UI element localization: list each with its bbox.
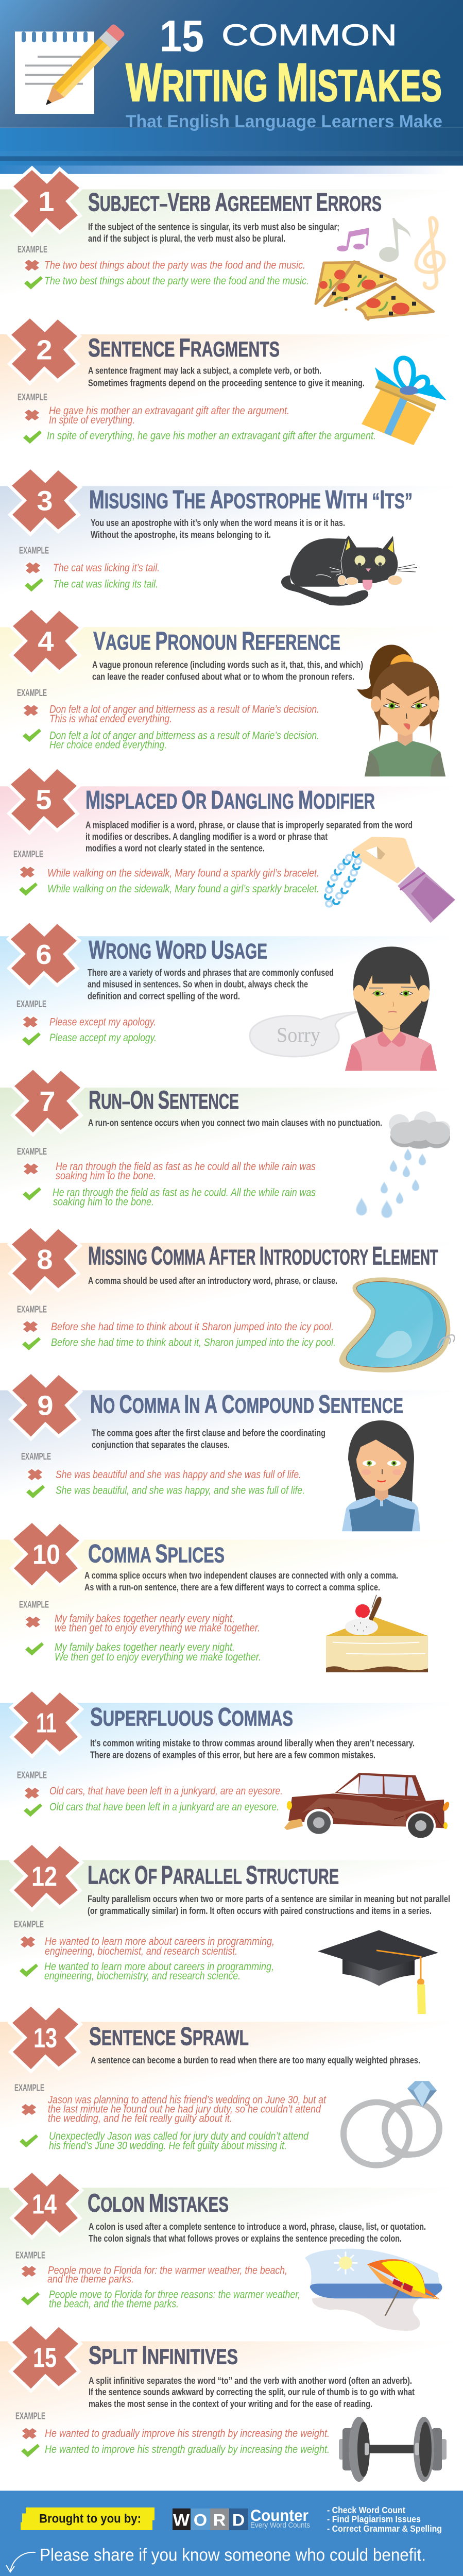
icon: wrong <box>24 1163 38 1175</box>
icon: wrong <box>26 1616 40 1628</box>
panel: mistake 1 <box>0 170 463 320</box>
header background <box>0 0 463 174</box>
wrong example <box>55 1613 260 1634</box>
body text: conjunction that separates the clauses. <box>92 1440 230 1450</box>
icon: correct <box>24 276 43 290</box>
wrong example: He wanted to learn more about careers in programming, <box>45 1936 275 1947</box>
correct example <box>55 1641 261 1663</box>
correct example <box>53 1187 316 1208</box>
icon: music notes <box>337 218 444 289</box>
logo: word counter: D <box>232 2511 245 2530</box>
number badge 6 <box>11 923 77 986</box>
icon: correct <box>22 1032 41 1046</box>
number badge 4: 4 <box>38 625 54 657</box>
example label: EXAMPLE <box>17 1304 47 1315</box>
number badge 7 <box>14 1070 80 1132</box>
number badge 15: 15 <box>33 2342 57 2373</box>
panel: mistake 13 <box>0 2007 463 2165</box>
correct example: People move to Florida for three reasons: the warmer weather, <box>49 2289 300 2300</box>
icon: wrong <box>24 705 38 716</box>
panel: mistake 8 <box>0 1228 463 1372</box>
body text <box>89 2376 415 2410</box>
body text: definition and correct spelling of the word. <box>88 991 240 1002</box>
body text: A vague pronoun reference (including words such as it, that, this, and which) <box>92 660 363 671</box>
heading: MISPLACED OR DANGLING MODIFIER <box>85 785 375 814</box>
number badge 8 <box>12 1228 78 1291</box>
icon: wrong <box>23 1321 38 1332</box>
wrong example: My family bakes together nearly every night, <box>55 1613 235 1624</box>
wrong example <box>47 2094 327 2125</box>
wrong example: People move to Florida for: the warmer weather, the beach, <box>48 2264 287 2276</box>
logo: word counter: Counter <box>250 2506 308 2524</box>
wrong example: engineering, biochemist, and research scientist. <box>45 1945 237 1957</box>
number badge 12 <box>13 1845 79 1907</box>
body text <box>91 518 345 540</box>
panel: mistake 4 <box>0 610 463 776</box>
icon: correct <box>26 1485 45 1498</box>
correct example: He wanted to learn more about careers in programming, <box>44 1960 274 1973</box>
feature list: - Check Word Count <box>327 2505 405 2515</box>
number badge 11: 11 <box>36 1707 57 1738</box>
wrong example: Before she had time to think about it Sharon jumped into the icy pool. <box>51 1320 334 1333</box>
number badge 6: 6 <box>36 939 52 970</box>
heading: MISUSING THE APOSTROPHE WITH “ITS” <box>89 485 413 514</box>
example label: EXAMPLE <box>16 999 46 1010</box>
example label: EXAMPLE <box>18 244 47 255</box>
heading: NO COMMA IN A COMPOUND SENTENCE <box>90 1390 403 1418</box>
correct example: We then get to enjoy everything we make together. <box>55 1651 261 1663</box>
logo: word counter: R <box>213 2511 226 2530</box>
wrong example: In spite of everything. <box>49 414 135 426</box>
icon: wrong <box>20 867 35 878</box>
wrong example: He gave his mother an extravagant gift after the argument. <box>49 404 289 417</box>
number badge 11 <box>13 1691 79 1754</box>
icon: dumbbell <box>339 2417 447 2482</box>
logo: word counter: Every Word Counts <box>250 2521 310 2530</box>
wrong example: and the theme parks. <box>47 2273 134 2285</box>
wrong example: He ran through the field as fast as he could all the while rain was <box>56 1160 316 1173</box>
feature list: - Correct Grammar & Spelling <box>327 2523 442 2534</box>
wrong example: She was beautiful and she was happy and she was full of life. <box>56 1468 301 1481</box>
panel: mistake 10 <box>0 1523 463 1672</box>
icon: rain cloud <box>356 1111 450 1218</box>
feature list <box>327 2505 442 2534</box>
body text <box>88 1894 450 1917</box>
icon: wrong <box>26 563 40 573</box>
example label: EXAMPLE <box>17 688 47 699</box>
icon: correct <box>20 1963 38 1977</box>
example label: EXAMPLE <box>17 1770 47 1781</box>
icon: pizza <box>316 262 433 320</box>
icon: notepad <box>15 31 94 114</box>
correct example: Please accept my apology. <box>49 1031 157 1044</box>
number badge 9: 9 <box>37 1390 54 1421</box>
correct example: Old cars that have been left in a junkyard are an eyesore. <box>49 1801 279 1813</box>
example label: EXAMPLE <box>15 2250 45 2261</box>
example label: EXAMPLE <box>21 1451 51 1462</box>
feature list: - Find Plagiarism Issues <box>327 2514 421 2524</box>
icon: apologetic girl <box>345 946 437 1071</box>
panel: mistake 2 <box>0 318 463 445</box>
arrow <box>6 2552 36 2572</box>
icon: correct <box>23 1187 41 1200</box>
body text: Sometimes fragments depend on the proceeding sentence to give it meaning. <box>88 378 365 388</box>
wrong example: The two best things about the party was the food and the music. <box>44 259 305 271</box>
body text: A comma should be used after an introductory word, phrase, or clause. <box>88 1276 337 1286</box>
icon: wrong <box>22 2266 36 2277</box>
logo: word counter: W <box>173 2511 190 2530</box>
panel: mistake 11 <box>0 1691 463 1840</box>
icon: wrong <box>25 410 39 421</box>
correct example: The cat was licking its tail. <box>53 578 158 590</box>
icon: angry woman <box>357 645 445 776</box>
correct example: his friend’s June 30 wedding. He felt guilty about missing it. <box>49 2140 287 2151</box>
wrong example: Don felt a lot of anger and bitterness as a result of Marie’s decision. <box>49 703 319 716</box>
number badge 12: 12 <box>31 1860 57 1892</box>
number badge 5: 5 <box>36 784 52 815</box>
correct example: Don felt a lot of anger and bitterness as a result of Marie’s decision. <box>49 730 319 741</box>
logo: word counter <box>173 2506 310 2530</box>
body text: There are a variety of words and phrases that are commonly confused <box>88 968 334 978</box>
number badge 1 <box>13 170 79 233</box>
speech bubble: sorry <box>250 1012 359 1057</box>
panel: mistake 14 <box>0 2173 463 2331</box>
correct example: the beach, and the theme parks. <box>49 2298 179 2310</box>
panel: mistake 6 <box>0 923 463 1071</box>
correct example: engineering, biochemistry, and research science. <box>44 1970 241 1982</box>
body text: makes the most sense in the context of your writing and for the ease of reading. <box>89 2399 372 2410</box>
icon: smiling girl <box>342 1420 420 1531</box>
wrong example: Jason was planning to attend his friend’s wedding on June 30, but at <box>47 2094 327 2106</box>
panel: mistake 12 <box>0 1845 463 2014</box>
wrong example: He wanted to gradually improve his strength by increasing the weight. <box>45 2428 330 2439</box>
body text <box>88 366 365 388</box>
number badge 4 <box>13 610 79 672</box>
icon: correct <box>25 578 43 591</box>
body text <box>90 1738 415 1760</box>
heading: COMMA SPLICES <box>88 1539 225 1568</box>
icon: cake <box>326 1595 428 1672</box>
correct example: In spite of everything, he gave his mother an extravagant gift after the argument. <box>47 430 376 442</box>
body text: If the subject of the sentence is singular, its verb must also be singular; <box>88 222 339 232</box>
panel: mistake 7 <box>0 1070 463 1218</box>
number badge 8: 8 <box>37 1244 53 1275</box>
wrong example: the last minute he found out he had jury duty, so he couldn’t attend <box>48 2103 321 2115</box>
correct example: Unexpectedly Jason was called for jury duty and couldn’t attend <box>49 2130 309 2142</box>
icon: wrong <box>23 1016 38 1028</box>
heading: SUBJECT–VERB AGREEMENT ERRORS <box>88 188 382 216</box>
body text: You use an apostrophe with it’s only when the word means it is or it has. <box>91 518 345 529</box>
number badge 10 <box>13 1523 79 1586</box>
heading: RUN–ON SENTENCE <box>89 1086 239 1114</box>
body text <box>92 660 363 683</box>
number badge 14: 14 <box>32 2189 57 2219</box>
number badge 10: 10 <box>32 1539 60 1570</box>
number badge 14 <box>13 2173 79 2235</box>
wrong example <box>49 703 319 725</box>
number badge 2: 2 <box>36 334 53 365</box>
wrong example: we then get to enjoy everything we make together. <box>55 1622 260 1634</box>
wrong example <box>49 404 289 426</box>
brought-to-you tag: Brought to you by: <box>39 2512 141 2526</box>
correct example <box>49 2289 300 2310</box>
icon: correct <box>23 728 41 742</box>
heading: SENTENCE SPRAWL <box>89 2022 249 2050</box>
correct example: My family bakes together nearly every night. <box>55 1641 235 1653</box>
wrong example <box>56 1160 316 1182</box>
correct example <box>49 730 319 751</box>
correct example: While walking on the sidewalk, Mary found a girl’s sparkly bracelet. <box>47 883 319 895</box>
wrong example <box>47 2264 287 2285</box>
correct example: Her choice ended everything. <box>49 739 167 751</box>
number badge 1: 1 <box>38 186 55 217</box>
icon: hand with bracelet <box>325 837 455 923</box>
icon: correct <box>19 883 38 896</box>
wrong example: the wedding, and he felt really guilty about it. <box>48 2112 232 2125</box>
example label: EXAMPLE <box>18 392 47 403</box>
wrong example: soaking him to the bone. <box>56 1170 156 1182</box>
number badge 13: 13 <box>33 2022 57 2054</box>
icon: correct <box>20 2134 38 2147</box>
icon: wrong <box>21 1937 35 1947</box>
body text: it modifies or describes. A dangling modifier is a word or phrase that <box>85 832 328 842</box>
heading: VAGUE PRONOUN REFERENCE <box>93 626 340 655</box>
correct example: soaking him to the bone. <box>53 1196 154 1208</box>
number badge 15 <box>12 2326 78 2388</box>
icon: cat <box>281 535 417 606</box>
correct example: She was beautiful, and she was happy, and she was full of life. <box>56 1484 305 1496</box>
body text: The comma goes after the first clause and before the coordinating <box>92 1428 325 1438</box>
panel: mistake 9 <box>0 1374 463 1531</box>
number badge 9 <box>12 1374 78 1437</box>
title: common: COMMON <box>221 18 397 52</box>
icon: old car <box>284 1773 451 1840</box>
icon: correct <box>22 1337 41 1350</box>
icon: correct <box>21 2444 40 2457</box>
body text: and misused in sentences. So when in doubt, always check the <box>88 979 308 990</box>
body text <box>85 820 413 854</box>
example label: EXAMPLE <box>17 1147 47 1157</box>
body text: Without the apostrophe, its means belonging to it. <box>91 530 271 540</box>
icon: pool <box>339 1277 454 1372</box>
correct example: He ran through the field as fast as he could. All the while rain was <box>53 1187 316 1198</box>
icon: wrong <box>28 1469 42 1480</box>
number badge 3: 3 <box>37 485 53 516</box>
body text <box>88 222 339 244</box>
heading: COLON MISTAKES <box>88 2189 229 2217</box>
icon: wrong <box>22 2428 37 2439</box>
icon: correct <box>25 1642 44 1655</box>
wrong example: Old cars, that have been left in a junkyard, are an eyesore. <box>49 1785 283 1797</box>
icon: wrong <box>22 2104 36 2115</box>
body text: A sentence fragment may lack a subject, a complete verb, or both. <box>88 366 321 376</box>
panel: mistake 5 <box>0 768 463 923</box>
example label: EXAMPLE <box>19 1600 49 1610</box>
heading: LACK OF PARALLEL STRUCTURE <box>88 1860 339 1889</box>
correct example <box>49 2130 309 2151</box>
logo: word counter: O <box>194 2511 207 2530</box>
body text <box>84 1570 398 1593</box>
wrong example: While walking on the sidewalk, Mary found a sparkly girl’s bracelet. <box>47 867 319 879</box>
correct example <box>44 1960 274 1982</box>
heading: WRONG WORD USAGE <box>89 935 267 964</box>
heading: SENTENCE FRAGMENTS <box>88 333 280 362</box>
wrong example: This is what ended everything. <box>49 713 172 725</box>
body text: can leave the reader confused about what or to whom the pronoun refers. <box>92 672 354 683</box>
number badge 7: 7 <box>39 1086 56 1117</box>
panel: mistake 15 <box>0 2326 463 2482</box>
correct example: The two best things about the party were the food and the music. <box>44 275 309 287</box>
icon: correct <box>21 2292 40 2306</box>
body text <box>88 968 334 1002</box>
body text <box>92 1428 325 1450</box>
number badge 2 <box>11 318 77 381</box>
subtitle: That English Language Learners Make <box>126 112 442 131</box>
correct example: He wanted to improve his strength gradually by increasing the weight. <box>45 2443 330 2455</box>
brought-to-you tag <box>21 2507 155 2530</box>
example label: EXAMPLE <box>14 1920 44 1930</box>
body text: and if the subject is plural, the verb must also be plural. <box>88 233 285 244</box>
number badge 13 <box>12 2007 78 2069</box>
body text: modifies a word not clearly stated in the sentence. <box>85 843 265 854</box>
wrong example: The cat was licking it’s tail. <box>53 562 160 574</box>
icon: pencil <box>40 23 126 110</box>
title: 15: 15 <box>160 11 204 61</box>
icon: rings <box>344 2081 439 2165</box>
wrong example <box>45 1936 275 1957</box>
icon: correct <box>23 430 42 444</box>
icon: wrong <box>25 1788 39 1799</box>
example label: EXAMPLE <box>19 546 49 556</box>
footer <box>0 2490 463 2576</box>
number badge 3 <box>12 469 78 532</box>
example label: EXAMPLE <box>13 849 43 860</box>
number badge 5 <box>11 768 77 831</box>
correct example: Before she had time to think about it, Sharon jumped into the icy pool. <box>51 1336 336 1348</box>
example label: EXAMPLE <box>15 2411 45 2422</box>
icon: wrong <box>25 260 39 271</box>
wrong example: Please except my apology. <box>49 1016 156 1028</box>
icon: correct <box>24 1803 42 1817</box>
heading: SUPERFLUOUS COMMAS <box>90 1702 293 1731</box>
icon: graduation cap <box>318 1930 438 2014</box>
icon: beach umbrella <box>305 2249 442 2331</box>
speech bubble: sorry: Sorry <box>277 1023 320 1046</box>
example label: EXAMPLE <box>14 2083 44 2093</box>
panel: mistake 3 <box>0 469 463 606</box>
icon: gift <box>362 358 447 445</box>
heading: SPLIT INFINITIVES <box>89 2341 238 2369</box>
body text <box>89 2222 426 2244</box>
